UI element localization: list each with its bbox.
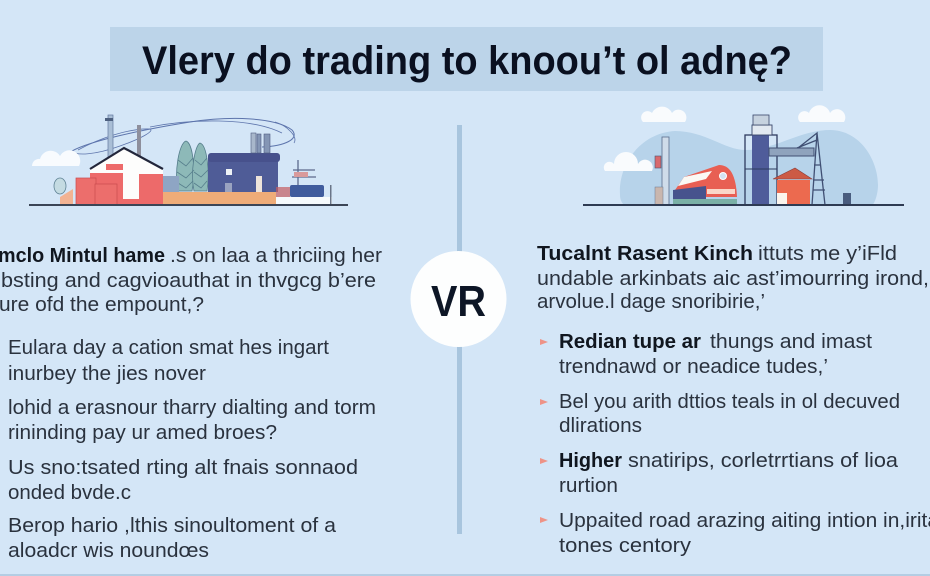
text block: left intro <box>0 244 382 316</box>
bullet list: left: onded bvde.c <box>8 481 131 504</box>
bullet list: right: tones centory <box>559 534 692 557</box>
icon: red truck <box>673 165 737 204</box>
text block: left intro: bsting and cagvioauthat in thvgcg b’ere <box>1 269 376 292</box>
bullet list: left: rininding pay ur amed broes? <box>8 421 277 444</box>
bullet list: left: lohid a erasnour tharry dialting and torm <box>8 396 376 419</box>
text block: right intro: arvolue.l dage snoribirie,’ <box>537 290 765 313</box>
icon: orange wall <box>163 192 276 205</box>
text block: right intro: Tucalnt Rasent Kinch <box>537 242 753 265</box>
icon: left pole <box>655 137 669 205</box>
illustration: left industrial scene <box>29 115 348 206</box>
bullet list: left: inurbey the jies nover <box>8 362 206 385</box>
text block: right intro: undable arkinbats aic ast’imourring irond, <box>537 267 929 290</box>
ground line <box>29 204 348 206</box>
bullet list: right: thungs and imast <box>710 330 872 353</box>
VR badge <box>410 251 506 347</box>
icon: bridge and pylon <box>769 133 825 205</box>
bullet list: right: Bel you arith dttios teals in ol decuved <box>559 390 900 413</box>
text block: left intro: mclo Mintul hame <box>0 244 165 267</box>
icon: left cloud <box>32 150 80 166</box>
VR badge: VR <box>431 277 486 326</box>
bullet list: right: trendnawd or neadice tudes,’ <box>559 355 828 378</box>
bullet list: right: Higher <box>559 449 622 472</box>
bullet list: left <box>8 336 376 562</box>
icon: tower <box>745 115 777 205</box>
text block: left intro: .s on laa a thriciing her <box>170 244 382 267</box>
bullet list: right: dlirations <box>559 414 642 437</box>
icon: ship <box>276 160 332 205</box>
icon: trees <box>177 141 208 191</box>
text block: right intro <box>537 242 929 313</box>
bullet list: left: aloadcr wis noundœs <box>8 539 209 562</box>
bullet list: left: Us sno:tsated rting alt fnais sonnaod <box>8 456 358 479</box>
illustration: right industrial scene <box>583 105 904 206</box>
title banner <box>110 27 823 91</box>
icon: house <box>90 148 163 205</box>
bullet list: right: Redian tupe ar <box>559 330 701 353</box>
icon: wind swirl <box>72 118 295 154</box>
center divider <box>457 125 462 534</box>
bullet list: right <box>540 330 930 557</box>
bullet list: right: Uppaited road arazing aiting intion in,irita <box>559 509 930 532</box>
icon: red shed <box>60 178 117 205</box>
icon: blue building <box>208 133 280 192</box>
bullet list: left: Berop hario ,lthis sinoultoment of a <box>8 514 337 537</box>
icon: small tree <box>54 178 66 194</box>
bullet arrows <box>540 339 548 523</box>
text block: left intro: ure ofd the empount,? <box>0 293 204 316</box>
bullet list: left: Eulara day a cation smat hes ingart <box>8 336 329 359</box>
icon: clouds <box>604 105 845 171</box>
ground line <box>583 204 904 206</box>
background blob <box>620 130 878 205</box>
bullet list: right: snatirips, corletrrtians of lioa <box>628 449 899 472</box>
bullet list: right: rurtion <box>559 474 618 497</box>
icon: small figure <box>843 193 851 204</box>
icon: antennas <box>105 115 141 167</box>
text block: right intro: ittuts me y’iFld <box>758 242 897 265</box>
title: Vlery do trading to knoou’t ol adnę? <box>142 39 792 83</box>
icon: small red house <box>773 168 812 205</box>
